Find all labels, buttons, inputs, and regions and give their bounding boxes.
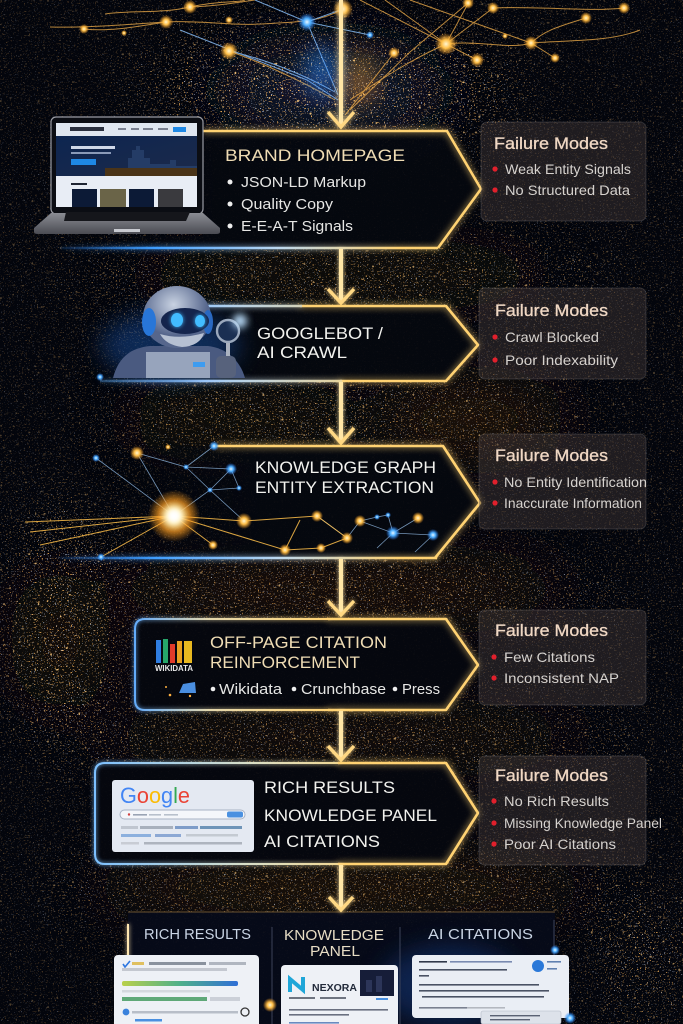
flow arrow: citations to rich results (328, 711, 354, 760)
icon: google search card (112, 780, 254, 852)
heading: AI crawl: AI CRAWL (257, 343, 347, 362)
failure modes box 1: Weak Entity Signals (505, 161, 631, 177)
failure modes box 2: Crawl Blocked (505, 329, 599, 345)
failure modes box 4: Inconsistent NAP (504, 670, 619, 686)
failure modes box 2: Failure Modes (495, 301, 608, 320)
failure modes box 4: Failure Modes (495, 621, 608, 640)
card: knowledge panel preview (281, 965, 398, 1024)
icon: wikidata logo (155, 639, 196, 697)
heading: knowledge panel column: KNOWLEDGE (284, 927, 384, 944)
panel: brand homepage (34, 117, 481, 248)
icon: wikidata logo: WIKIDATA (155, 664, 193, 673)
panel: knowledge graph (25, 441, 480, 561)
flow arrow: crawl to knowledge graph (328, 382, 354, 443)
network: top light constellation (50, 0, 640, 115)
heading: knowledge panel column: PANEL (310, 943, 360, 960)
flow arrow: homepage to crawl (328, 249, 354, 303)
panel: googlebot crawl (90, 286, 478, 381)
list: citation sources: Press (402, 681, 440, 698)
heading: AI citations column: AI CITATIONS (428, 926, 533, 943)
heading: reinforcement: REINFORCEMENT (210, 653, 360, 672)
heading: knowledge panel column (284, 927, 384, 960)
failure modes box 1 (481, 122, 646, 221)
failure modes box 5: Poor AI Citations (504, 836, 616, 852)
failure modes box 5: No Rich Results (504, 793, 609, 809)
list: citation sources (211, 681, 440, 698)
failure modes box 3: Failure Modes (495, 446, 608, 465)
failure modes box 5 (479, 756, 662, 865)
flow arrow: knowledge graph to citations (328, 559, 354, 615)
list: citation sources: Wikidata (219, 681, 283, 698)
list: homepage features: Quality Copy (241, 196, 334, 213)
heading: entity extraction: ENTITY EXTRACTION (255, 478, 434, 497)
failure modes box 1: No Structured Data (505, 182, 630, 198)
panel: rich results (95, 763, 478, 864)
flow arrow: top to homepage (328, 0, 354, 127)
heading: googlebot: GOOGLEBOT / (257, 324, 383, 343)
panel: outcomes (114, 912, 576, 1024)
chart: entity network (25, 441, 439, 561)
heading: rich results: RICH RESULTS (264, 778, 395, 797)
failure modes box 3: No Entity Identification (504, 474, 647, 490)
heading: rich results column: RICH RESULTS (144, 926, 251, 943)
failure modes box 2: Poor Indexability (505, 352, 618, 368)
failure modes box 5: Missing Knowledge Panel (504, 815, 662, 831)
icon: google search card: Google (120, 783, 190, 808)
heading: knowledge panel: KNOWLEDGE PANEL (264, 806, 437, 825)
heading: knowledge graph: KNOWLEDGE GRAPH (255, 458, 436, 477)
card: rich results preview (114, 955, 259, 1024)
heading: brand homepage: BRAND HOMEPAGE (225, 146, 405, 165)
failure modes box 3 (479, 434, 647, 529)
failure modes box 3: Inaccurate Information (504, 495, 642, 511)
card: knowledge panel preview: NEXORA (312, 982, 357, 994)
icon: robot (96, 286, 247, 381)
failure modes box 4 (479, 610, 646, 705)
icon: laptop (34, 117, 220, 234)
list: homepage features (228, 174, 366, 235)
heading: off-page citation: OFF-PAGE CITATION (210, 633, 387, 652)
card: AI citations preview (412, 955, 569, 1024)
failure modes box 2 (479, 288, 646, 379)
panel: off-page citations (135, 619, 478, 710)
list: citation sources: Crunchbase (301, 681, 386, 698)
list: homepage features: JSON-LD Markup (241, 174, 366, 191)
heading: AI citations: AI CITATIONS (264, 832, 380, 851)
failure modes box 1: Failure Modes (494, 134, 608, 153)
flow arrow: rich results to outcomes (329, 865, 353, 910)
list: homepage features: E-E-A-T Signals (241, 218, 353, 235)
failure modes box 4: Few Citations (504, 649, 595, 665)
failure modes box 5: Failure Modes (495, 766, 608, 785)
